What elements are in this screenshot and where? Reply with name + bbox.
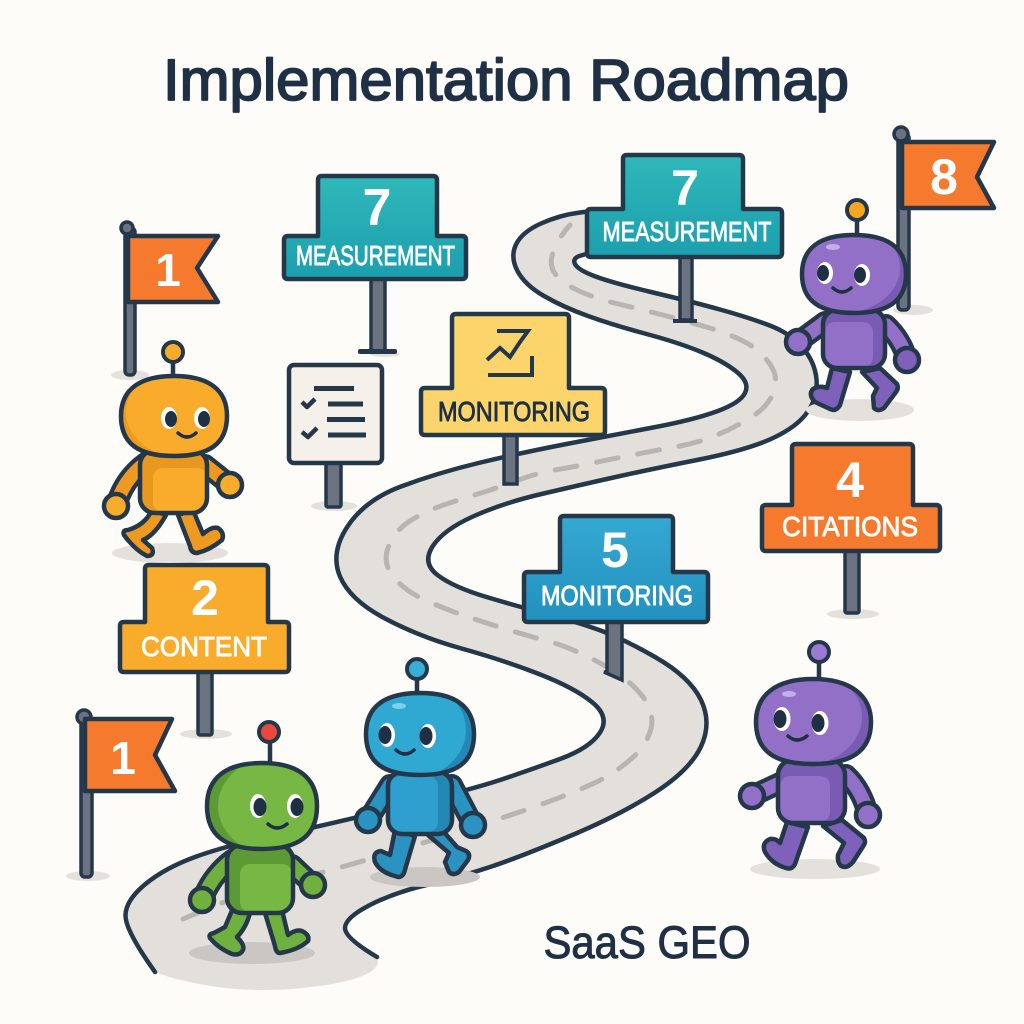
sign: 4 citations bbox=[762, 444, 940, 619]
sign: 7 measurement right bbox=[587, 155, 782, 323]
robot: orange bbox=[104, 342, 242, 563]
sign: 4 citations: 4 bbox=[836, 452, 864, 508]
checklist lines bbox=[314, 388, 366, 435]
robot: green bbox=[189, 722, 338, 964]
sign: 2 content: CONTENT bbox=[141, 631, 267, 662]
sign: 7 measurement left bbox=[284, 176, 466, 357]
robot: purple top bbox=[784, 200, 919, 421]
flag 1 bottom: 1 bbox=[110, 732, 136, 784]
flag 1 top: 1 bbox=[155, 244, 181, 296]
check marks bbox=[302, 399, 317, 437]
sign: 7 measurement left: MEASUREMENT bbox=[296, 240, 455, 271]
sign: 4 citations: CITATIONS bbox=[782, 511, 918, 542]
sign: checklist bbox=[289, 365, 382, 511]
sign: 5 monitoring blue bbox=[524, 516, 708, 680]
sign: 7 measurement right: 7 bbox=[671, 160, 699, 216]
flag 8: 8 bbox=[930, 149, 958, 205]
flag 8 bbox=[893, 127, 994, 315]
sign: 7 measurement left: 7 bbox=[363, 179, 391, 237]
icon: line chart bbox=[487, 331, 532, 375]
sign: 2 content bbox=[120, 565, 289, 739]
winding road bbox=[125, 210, 817, 990]
flag 1 bottom bbox=[66, 710, 175, 881]
sign: 7 measurement right: MEASUREMENT bbox=[602, 216, 772, 247]
sign: monitoring yellow bbox=[421, 314, 605, 484]
caption: SaaS GEO: SaaS GEO bbox=[544, 917, 750, 968]
robot: purple bottom bbox=[738, 642, 880, 879]
robot: blue bbox=[346, 659, 485, 887]
sign: 5 monitoring blue: 5 bbox=[601, 522, 629, 578]
flag 1 top bbox=[111, 222, 218, 380]
sign: 2 content: 2 bbox=[191, 570, 219, 626]
sign: 5 monitoring blue: MONITORING bbox=[541, 580, 693, 611]
title: Implementation Roadmap bbox=[163, 48, 849, 113]
sign: monitoring yellow: MONITORING bbox=[438, 396, 590, 427]
